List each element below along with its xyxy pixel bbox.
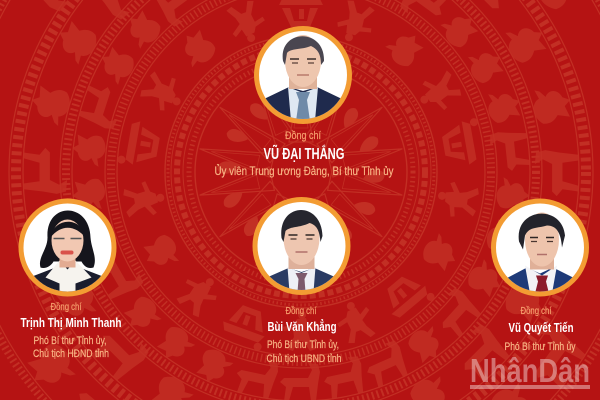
text: Trịnh Thị Minh Thanh xyxy=(20,301,122,360)
inner star xyxy=(200,103,402,266)
role: Vũ Quyết Tiến: Phó Bí thư Tỉnh ủy xyxy=(504,341,576,353)
role: Bùi Văn Khẳng: Phó Bí thư Tỉnh ủy, xyxy=(267,339,339,351)
label: Đồng chí: Đồng chí xyxy=(520,305,552,317)
name: Trịnh Thị Minh Thanh: Trịnh Thị Minh Thanh xyxy=(20,315,122,330)
portrait: Trịnh Thị Minh Thanh xyxy=(18,198,116,296)
text: Vũ Quyết Tiến xyxy=(504,305,576,353)
name: Vũ Đại Thắng: VŨ ĐẠI THẮNG xyxy=(264,143,344,163)
role: Vũ Đại Thắng: Ủy viên Trung ương Đảng, Bí thư Tỉnh ủy xyxy=(214,163,394,178)
figure ring 1 xyxy=(117,0,485,352)
role: Trịnh Thị Minh Thanh: Phó Bí thư Tỉnh ủy, xyxy=(34,335,106,347)
text: Vũ Đại Thắng xyxy=(214,130,394,178)
portrait: Bùi Văn Khẳng xyxy=(252,197,350,295)
portrait: Vũ Đại Thắng xyxy=(254,26,352,124)
portrait: Vũ Quyết Tiến xyxy=(491,198,589,296)
label: Đồng chí: Đồng chí xyxy=(285,130,321,142)
role line 2: Bùi Văn Khẳng: Chủ tịch UBND tỉnh xyxy=(266,353,342,365)
name: Vũ Quyết Tiến: Vũ Quyết Tiến xyxy=(508,320,574,335)
role line 2: Trịnh Thị Minh Thanh: Chủ tịch HĐND tỉnh xyxy=(33,348,109,360)
text: Bùi Văn Khẳng xyxy=(266,305,342,365)
label: Đồng chí: Đồng chí xyxy=(50,301,82,313)
name: Bùi Văn Khẳng: Bùi Văn Khẳng xyxy=(268,319,337,334)
figure ring 2 xyxy=(71,0,531,400)
label: Đồng chí: Đồng chí xyxy=(286,305,317,317)
